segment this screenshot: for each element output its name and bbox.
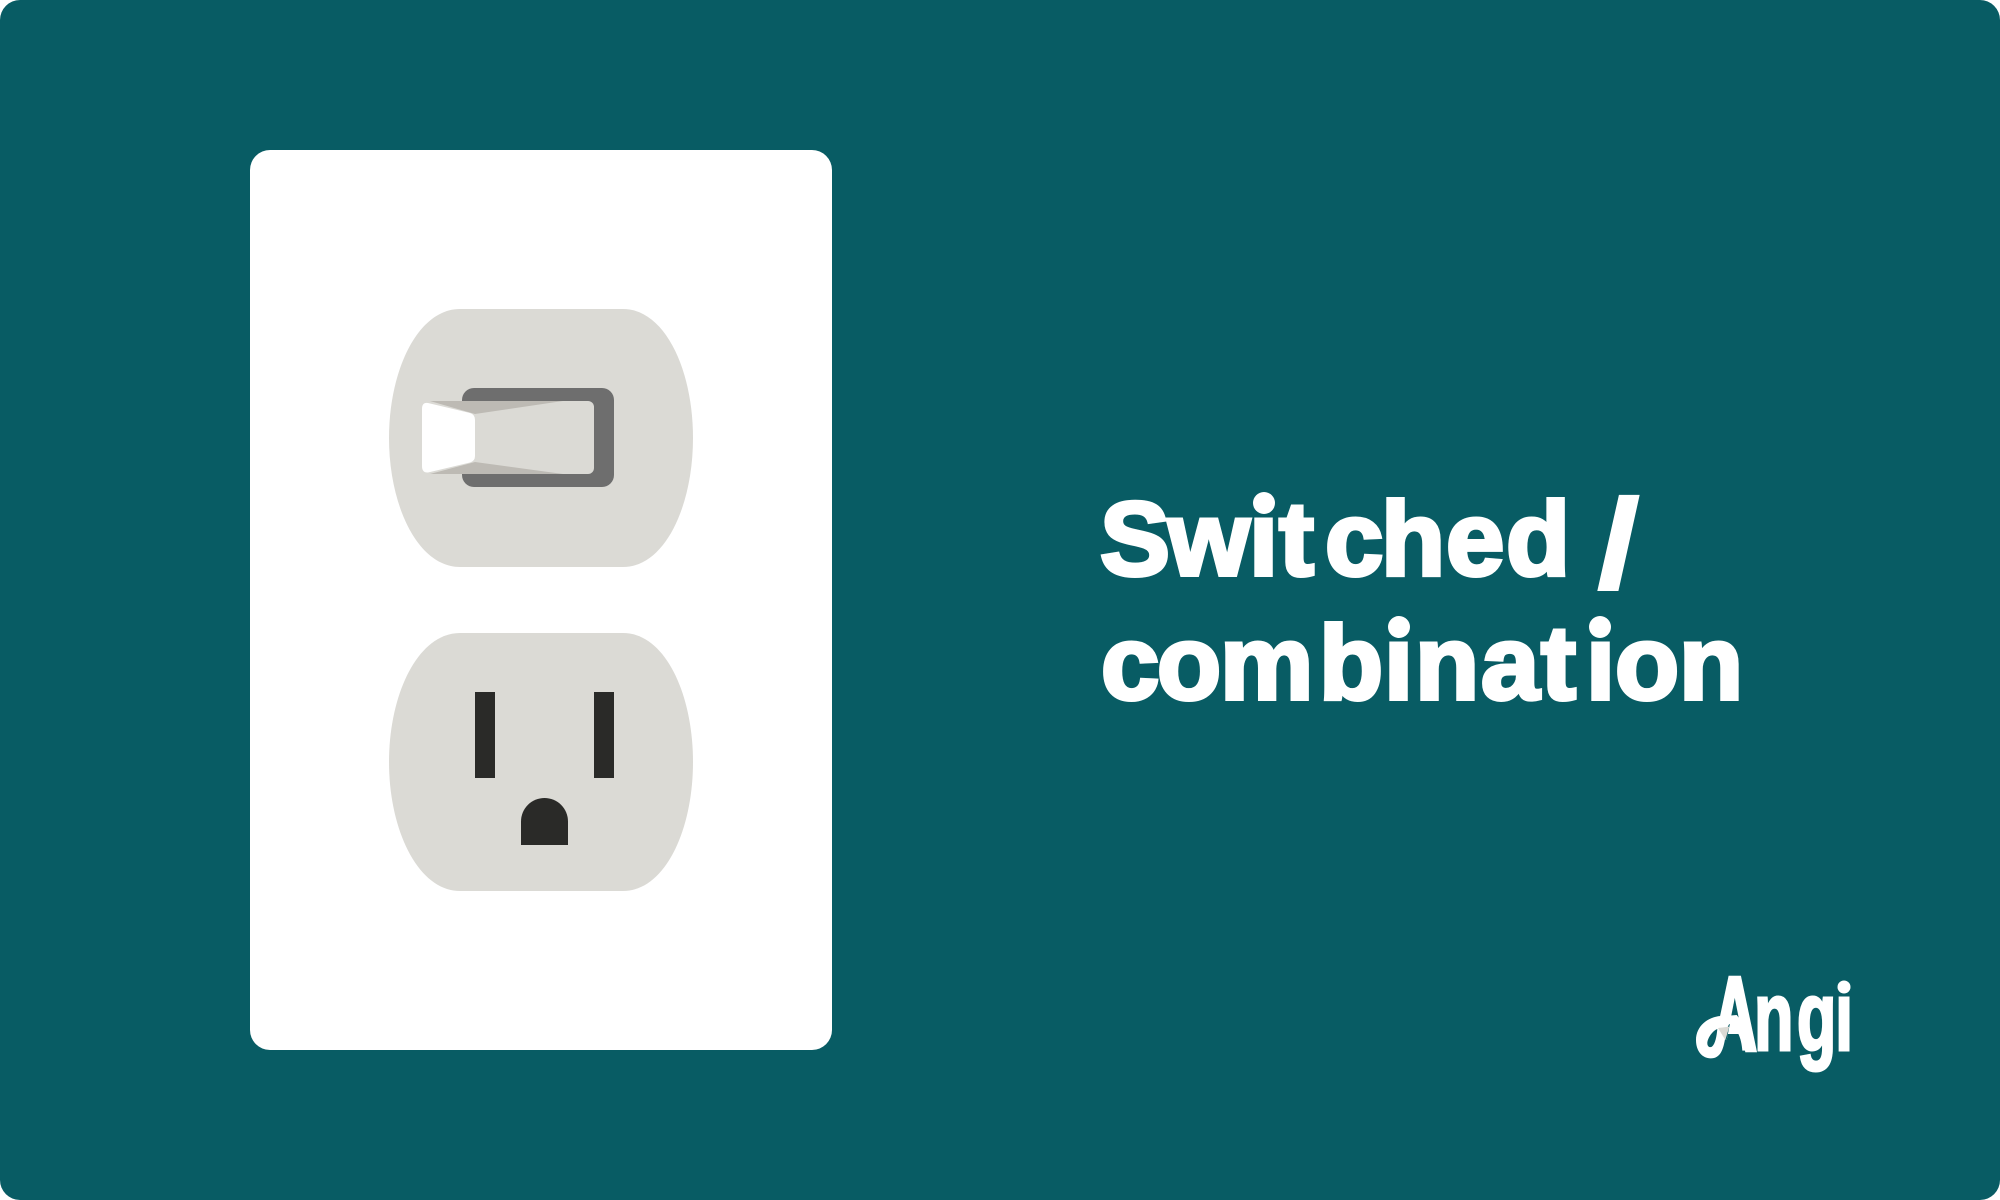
right slot	[594, 692, 614, 778]
logo shaded fold	[1718, 1027, 1729, 1040]
rocker lit white end	[422, 403, 475, 473]
receptacle faceplate	[389, 633, 693, 891]
logo swoosh	[1693, 1015, 1748, 1060]
Angi logo	[1693, 957, 1855, 1073]
ground hole	[521, 798, 568, 845]
receptacle: lower faceplate with slots	[389, 633, 693, 891]
Angi logo: A	[1713, 957, 1757, 1073]
switch dark recess	[462, 388, 614, 487]
switch faceplate	[389, 309, 693, 567]
title: Switched	[1100, 481, 1570, 598]
rocker bottom shadow	[430, 462, 563, 474]
rocker top shadow	[430, 401, 563, 414]
rocker body	[436, 401, 594, 474]
round i dots	[1250, 492, 1617, 640]
title	[1100, 474, 1743, 722]
title: combination	[1101, 605, 1743, 722]
switch: upper faceplate with rocker toggle	[389, 309, 693, 567]
left slot	[475, 692, 495, 778]
outlet wall plate	[250, 150, 832, 1050]
logo i dot	[1833, 972, 1855, 996]
title: /	[1598, 474, 1639, 614]
Angi logo: ngi	[1754, 961, 1853, 1071]
